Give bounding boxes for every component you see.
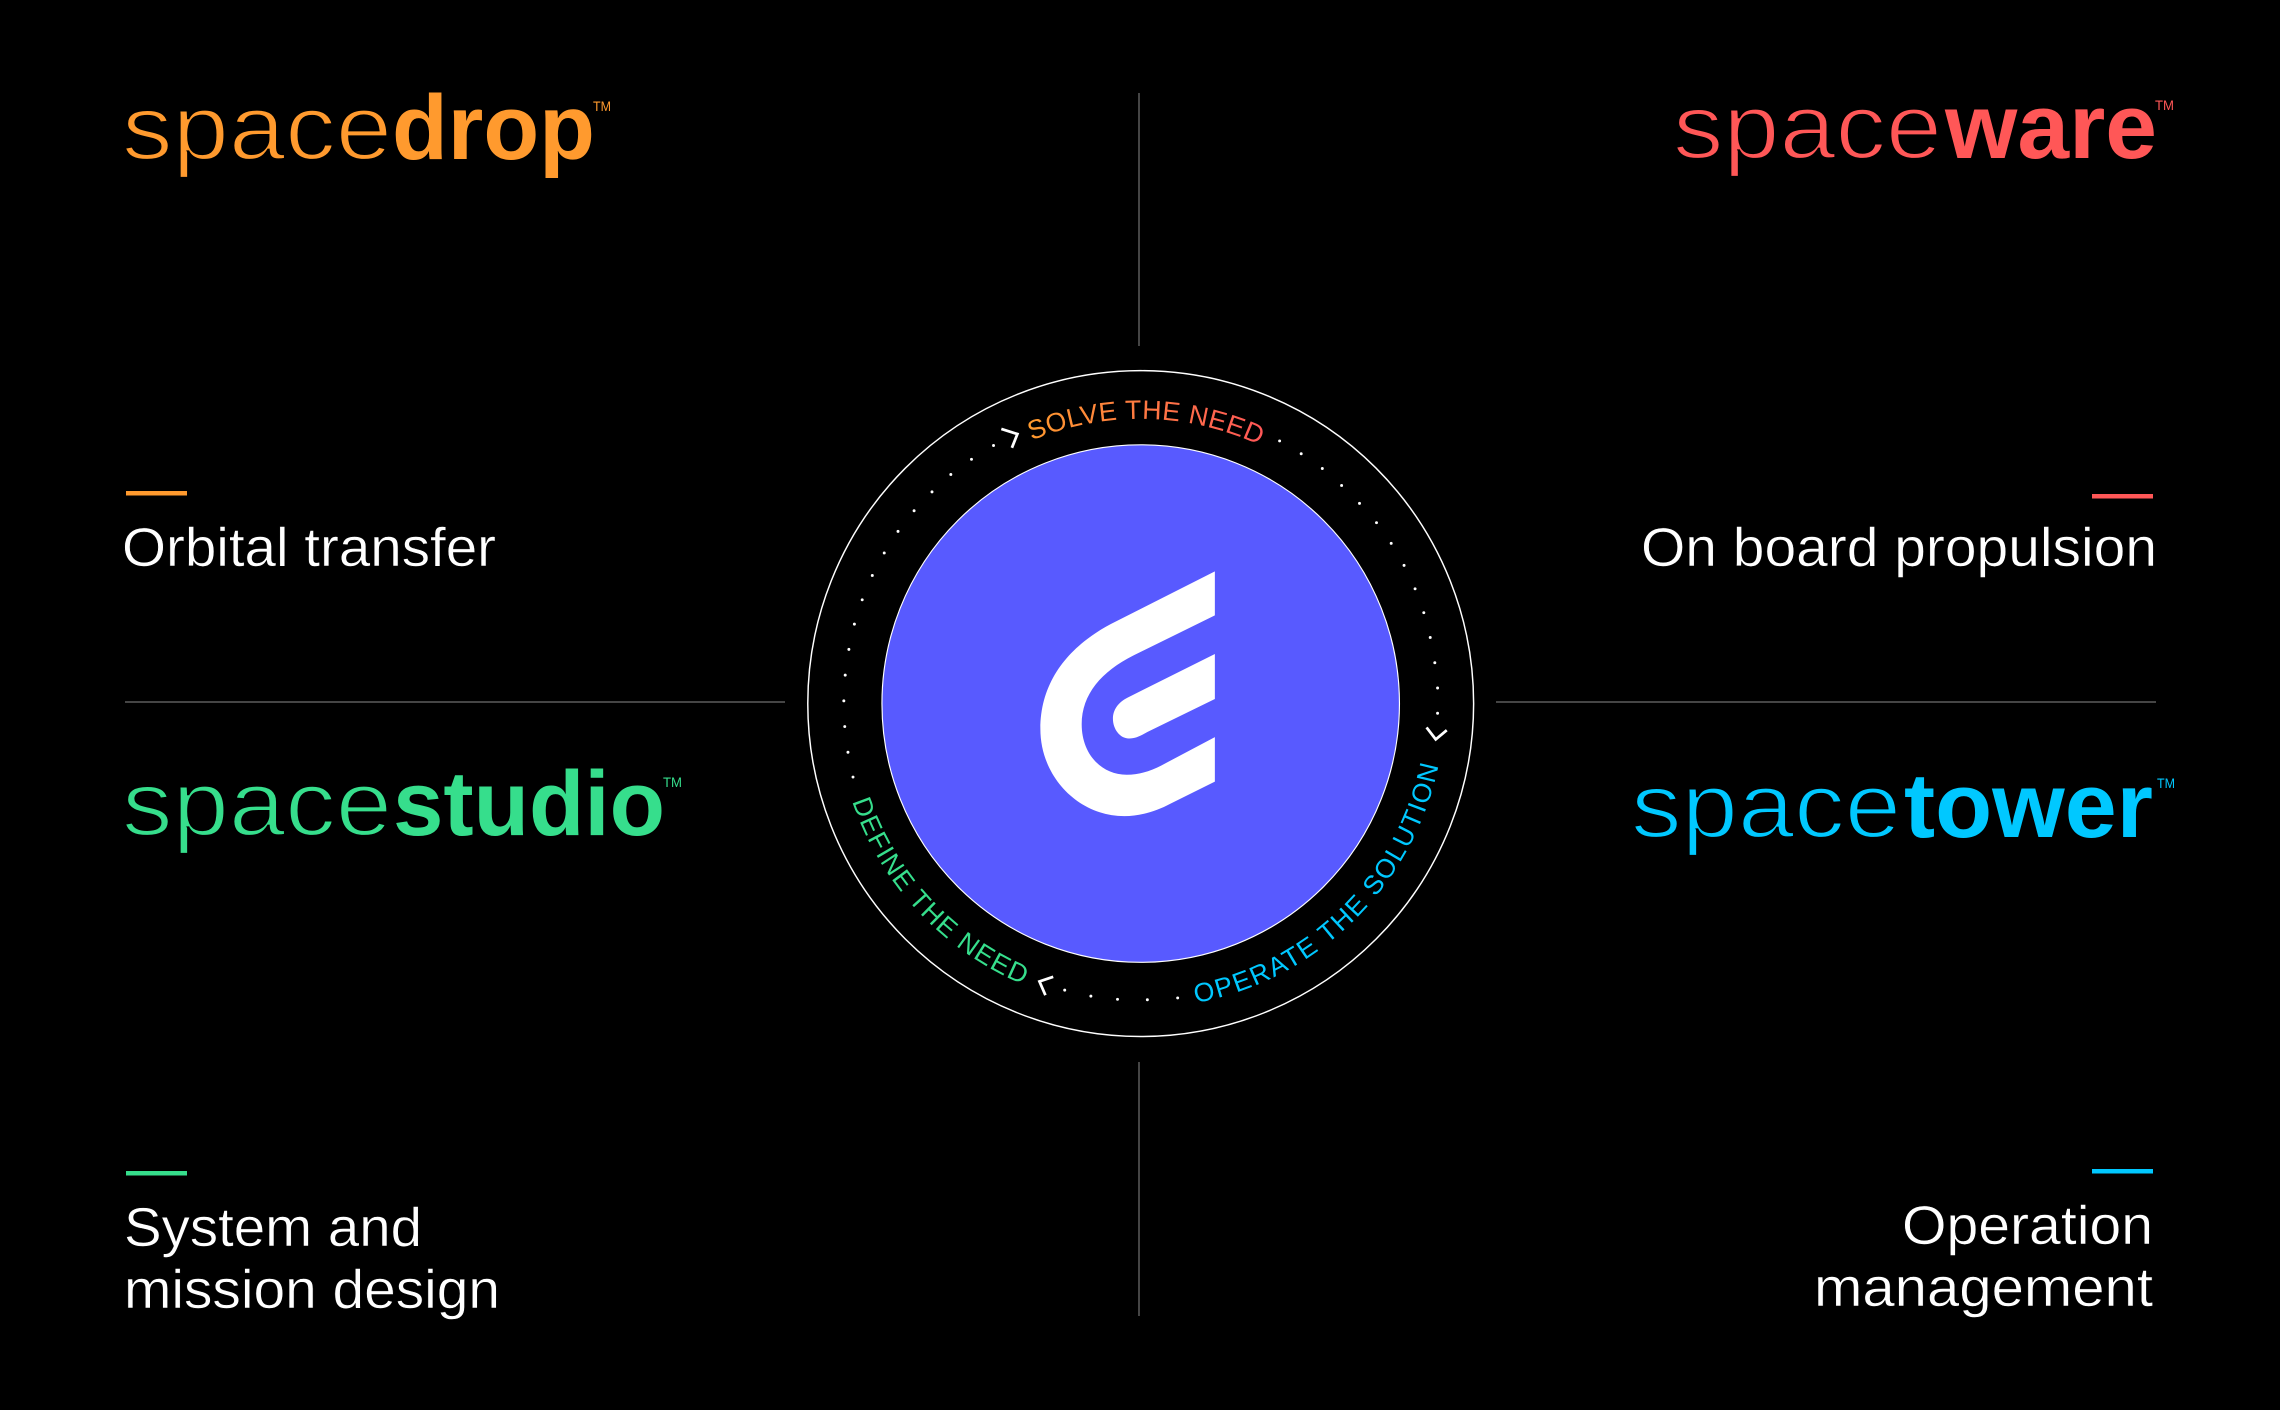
outer ring	[808, 371, 1474, 1037]
panel: spaceware	[1641, 76, 2174, 578]
logo: spacestudio: TM	[663, 774, 682, 790]
logo: spacestudio	[122, 753, 682, 855]
label: system and mission design: System and	[124, 1196, 422, 1258]
logo: spacedrop	[122, 77, 611, 179]
accent bar: spacetower	[2092, 1169, 2153, 1174]
central disc	[882, 445, 1399, 962]
dotted cycle track	[842, 439, 1439, 1001]
logo: spacetower: tower	[1904, 755, 2153, 857]
icon: company logo	[1040, 571, 1215, 816]
arrow: top	[1001, 429, 1017, 448]
logo: spacetower	[1631, 755, 2175, 857]
logo: spacetower: space	[1631, 755, 1901, 857]
logo: spacestudio: space	[122, 753, 392, 855]
label: on board propulsion: On board propulsion	[1641, 516, 2157, 578]
logo: spaceware: space	[1673, 76, 1942, 178]
panel: spacetower	[1631, 755, 2175, 1318]
logo: spacedrop: TM	[593, 98, 611, 114]
curved label: solve the need: SOLVE THE NEED	[1028, 400, 1263, 442]
panel: spacestudio	[122, 753, 682, 1320]
accent bar: spaceware	[2092, 494, 2153, 498]
label: system and mission design: mission design	[124, 1258, 500, 1320]
panel: spacedrop	[122, 77, 611, 578]
logo: spacetower: TM	[2157, 775, 2175, 791]
label: orbital transfer: Orbital transfer	[122, 516, 496, 578]
label: operation management: management	[1814, 1256, 2153, 1318]
curved label: define the need: DEFINE THE NEED	[852, 797, 1027, 982]
accent bar: spacedrop	[126, 491, 187, 496]
label: operation management	[1814, 1194, 2153, 1318]
arrow: right	[1427, 727, 1447, 739]
label: system and mission design	[124, 1196, 500, 1320]
logo: spaceware: ware	[1944, 76, 2157, 178]
accent bar: spacestudio	[126, 1171, 187, 1176]
logo: spacestudio: studio	[393, 753, 665, 855]
logo: spaceware	[1673, 76, 2174, 178]
cycle diagram	[807, 370, 1474, 1038]
logo: spaceware: TM	[2155, 97, 2174, 113]
label: operation management: Operation	[1902, 1194, 2153, 1256]
logo: spacedrop: drop	[392, 77, 595, 179]
logo: spacedrop: space	[122, 77, 392, 179]
curved label: operate the solution: OPERATE THE SOLUTION	[1194, 763, 1438, 1002]
arrow: bottom	[1039, 977, 1053, 995]
